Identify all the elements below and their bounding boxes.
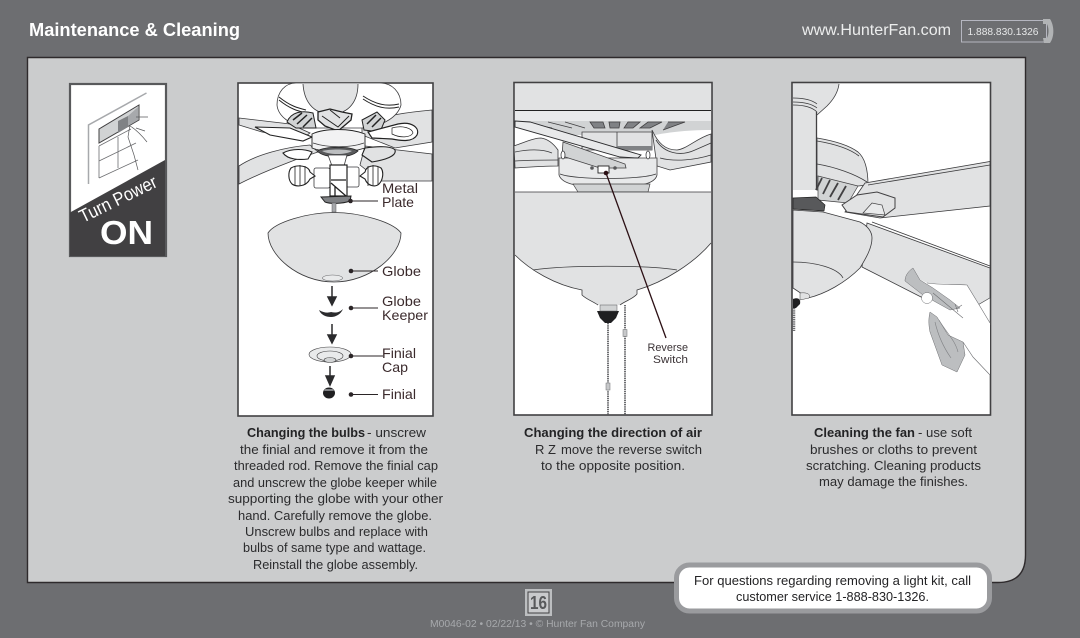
text: cleaning the fan: - use soft	[918, 425, 972, 440]
reverse switch label	[648, 342, 688, 366]
reverse switch pointer	[604, 171, 666, 338]
text: changing the direction of air: Changing the direction of air	[524, 425, 702, 440]
finial and pull chains	[597, 305, 627, 415]
fan illustration	[239, 83, 432, 212]
finial	[323, 388, 335, 398]
text: changing the bulbs: the finial and remove it from the	[240, 442, 428, 457]
panel: reverse switch diagram	[514, 82, 712, 415]
website address: www.HunterFan.com	[801, 22, 951, 39]
panel: cleaning the fan diagram	[792, 82, 990, 415]
text: changing the direction of air: move the reverse switch	[561, 442, 702, 457]
fan illustration	[514, 84, 711, 192]
text: changing the bulbs: supporting the globe with your other	[228, 491, 444, 506]
part labels: Finial	[382, 345, 416, 361]
part labels: Keeper	[382, 307, 428, 323]
panel: changing the bulbs diagram	[238, 83, 433, 416]
finial and chain	[793, 293, 810, 331]
phone number box: 1.888.830.1326	[968, 26, 1039, 38]
globe	[268, 212, 401, 282]
text: cleaning the fan: Cleaning the fan	[814, 425, 915, 440]
callout: light kit customer service	[676, 565, 990, 611]
panel: turn power on	[70, 84, 166, 256]
part labels	[382, 180, 428, 402]
fan illustration	[793, 84, 990, 305]
text: changing the bulbs	[228, 425, 444, 572]
panel: main content background	[28, 58, 1026, 582]
finial cap	[309, 347, 351, 362]
part labels: Finial	[382, 386, 416, 402]
part labels: Globe	[382, 293, 421, 309]
globe	[515, 192, 711, 305]
on label: ON	[100, 214, 153, 251]
dark banner	[70, 160, 165, 256]
text: changing the bulbs: and unscrew the globe keeper while	[233, 475, 437, 490]
text: changing the bulbs: Unscrew bulbs and replace with	[245, 524, 428, 539]
reverse switch label: Switch	[653, 354, 688, 366]
text: cleaning the fan: may damage the finishes.	[819, 474, 968, 489]
page number	[526, 590, 552, 616]
text: cleaning the fan: scratching. Cleaning products	[806, 458, 982, 473]
left motor arm	[514, 138, 558, 168]
text: cleaning the fan: brushes or cloths to prevent	[810, 442, 977, 457]
text: cleaning the fan	[806, 425, 982, 489]
right motor arm	[652, 130, 711, 170]
turn power label: Turn Power	[76, 171, 160, 227]
footer: M0046-02 • 02/22/13 • © Hunter Fan Company	[430, 619, 645, 630]
text: changing the direction of air	[524, 425, 702, 473]
globe	[793, 210, 872, 298]
arrows	[326, 286, 336, 385]
phone number box	[962, 19, 1053, 43]
text: changing the bulbs: bulbs of same type and wattage.	[243, 540, 426, 555]
text: changing the bulbs: hand. Carefully remove the globe.	[238, 508, 432, 523]
cleaning cloth and hand	[905, 268, 990, 375]
text: changing the bulbs: Reinstall the globe assembly.	[253, 557, 418, 572]
part labels: Metal	[382, 180, 418, 196]
text: changing the bulbs: threaded rod. Remove the finial cap	[234, 458, 438, 473]
callout lines	[350, 201, 383, 394]
reverse switch label: Reverse	[648, 342, 688, 354]
motor fins	[287, 112, 316, 128]
globe keeper	[319, 309, 343, 317]
icon: wall switch and hand	[88, 93, 148, 184]
text: changing the direction of air: to the opposite position.	[541, 458, 685, 473]
text: changing the bulbs: Changing the bulbs	[247, 425, 365, 440]
callout: light kit customer service: customer service 1-888-830-1326.	[736, 589, 929, 604]
text: changing the direction of air: R Z	[535, 442, 556, 457]
part labels: Globe	[382, 263, 421, 279]
part labels: Plate	[382, 194, 414, 210]
title: Maintenance & Cleaning	[29, 20, 240, 40]
text: changing the bulbs: - unscrew	[367, 425, 427, 440]
part labels: Cap	[382, 359, 408, 375]
callout: light kit customer service: For questions regarding removing a light kit, call	[694, 573, 971, 588]
page number: 16	[530, 593, 547, 613]
